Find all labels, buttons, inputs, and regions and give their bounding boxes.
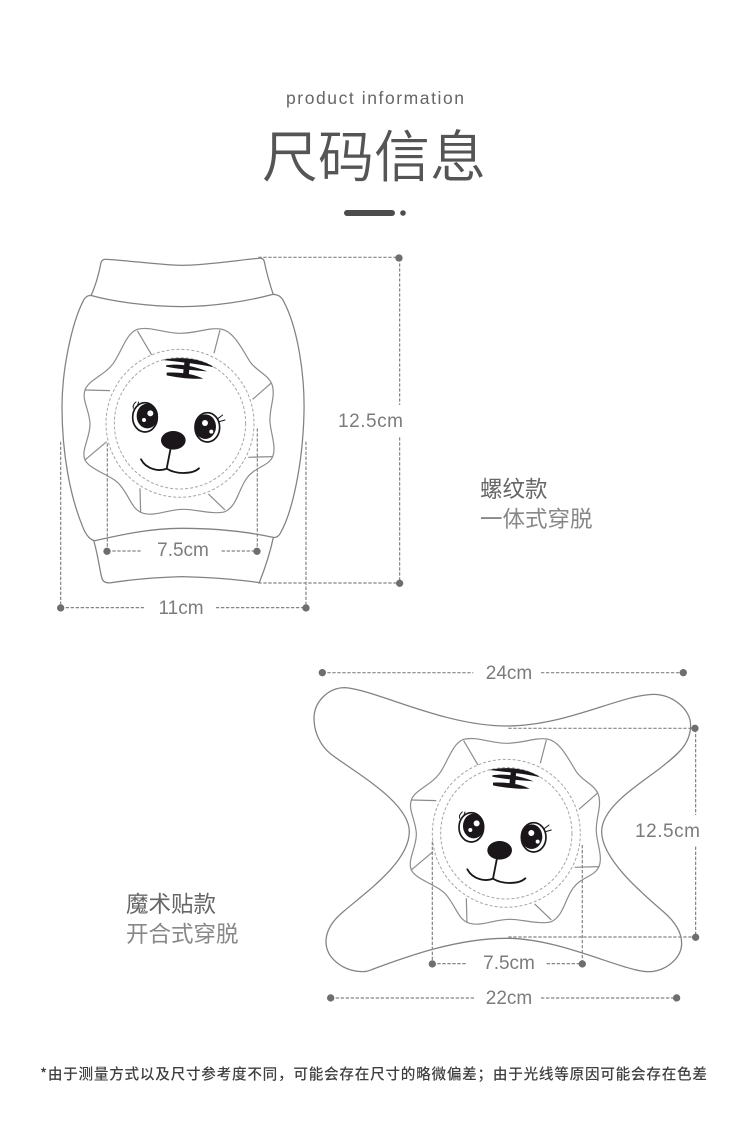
- label: 22cm: 22cm: [486, 988, 532, 1009]
- title underline mark: [344, 210, 406, 216]
- diagram: threaded knee pad: [57, 254, 403, 619]
- text: 螺纹款 一体式穿脱: 螺纹款: [480, 472, 548, 504]
- wrap outline: [314, 688, 691, 972]
- label: 12.5cm: 12.5cm: [338, 411, 403, 432]
- tiger patch: [84, 328, 274, 514]
- label: 7.5cm: 7.5cm: [157, 540, 209, 561]
- footnote: *由于测量方式以及尺寸参考度不同，可能会存在尺寸的略微偏差；由于光线等原因可能会存在色差: [40, 1063, 707, 1084]
- title: 尺码信息: 尺码信息: [262, 113, 486, 194]
- tiger patch: [410, 738, 600, 924]
- label: 12.5cm: 12.5cm: [635, 821, 700, 842]
- label: 24cm: 24cm: [486, 663, 532, 684]
- text: 魔术贴款 开合式穿脱: 魔术贴款: [126, 887, 216, 919]
- dimension lines: [57, 254, 403, 612]
- knee pad outline: [62, 258, 304, 583]
- text: 魔术贴款 开合式穿脱: [126, 887, 239, 949]
- subtitle: product information: product information: [286, 88, 464, 108]
- text: 魔术贴款 开合式穿脱: 开合式穿脱: [126, 917, 239, 949]
- label: 11cm: 11cm: [158, 598, 204, 619]
- text: 螺纹款 一体式穿脱: 一体式穿脱: [480, 502, 593, 534]
- label: 7.5cm: 7.5cm: [483, 953, 535, 974]
- dimension lines: [319, 669, 699, 1002]
- text: 螺纹款 一体式穿脱: [480, 472, 593, 534]
- diagram: velcro knee pad: [314, 663, 700, 1009]
